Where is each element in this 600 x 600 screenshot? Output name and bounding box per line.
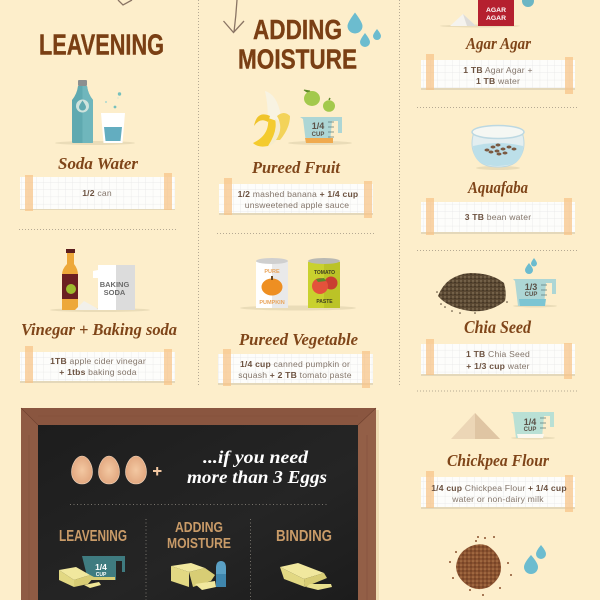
icon: banana, apples and measuring cup: 1/4 [312,121,324,131]
icon: measuring cup and butter: CUP [96,572,107,578]
chalk column: leavening [59,528,127,588]
icon: butter and salt shaker [171,561,226,590]
icon: agar agar box and powder [440,0,534,28]
subheading: aquafaba: Aquafaba [467,178,528,197]
note card: chickpea flour: water or non-dairy milk [451,494,544,504]
chalk heading [187,447,327,487]
icon: bowl of bean water [472,126,524,170]
panel: pureed fruit [219,90,373,218]
heading: leavening: LEAVENING [39,30,164,62]
panel: chalkboard [21,408,379,600]
subheading: chia seed: Chia Seed [464,317,532,337]
note card: chia seed: + 1/3 cup water [466,361,530,371]
icon: soda water bottle and glass [55,80,135,145]
arrow: to leavening [118,0,132,5]
panel: chia seed [421,258,575,379]
icon: pumpkin and tomato cans: PUMPKIN [259,300,285,306]
note card: chia seed [421,339,575,379]
note card: soda water [20,173,175,211]
panel: pureed vegetable [218,258,373,388]
icon: agar agar box and powder: AGAR [486,15,506,22]
icon: measuring cup and butter [59,556,125,588]
panel: aquafaba [421,126,575,235]
panel: flax seed [439,536,561,600]
icon: flour pile and measuring cup [451,412,555,440]
icon: chia seeds, drops and measuring cup [436,258,557,314]
heading: adding moisture: ADDING [253,14,342,45]
icon: pumpkin and tomato cans: PURE [264,269,280,275]
panel: vinegar and baking soda [20,249,177,385]
arrow: to adding moisture [224,0,244,32]
subheading: chickpea flour: Chickpea Flour [447,451,549,470]
frame [21,408,379,600]
note card: aquafaba [421,198,575,235]
note card: chia seed: 1 TB Chia Seed [466,349,530,359]
note card: agar agar [421,54,575,94]
chalk heading: more than 3 Eggs [187,467,327,487]
note card: agar agar: 1 TB Agar Agar + [463,65,533,75]
icon: three eggs [72,456,146,484]
subheading: soda water: Soda Water [58,154,138,173]
note card: pureed fruit: unsweetened apple sauce [245,200,349,210]
icon: measuring cup and butter: 1/4 [95,562,107,572]
note card: pureed vegetable [218,349,373,388]
chalk column: adding moisture: MOISTURE [167,535,231,552]
note card: pureed fruit [219,178,373,218]
note card: aquafaba: 3 TB bean water [465,212,531,222]
icon: flour pile and measuring cup: CUP [524,427,536,433]
icon: flour pile and measuring cup: 1/4 [524,417,536,427]
heading: adding moisture [238,14,357,74]
icon: banana, apples and measuring cup [253,90,352,147]
note card: pureed vegetable: 1/4 cup canned pumpkin or [240,359,350,369]
note card: vinegar and baking soda [20,346,175,385]
subheading: vinegar + baking soda: Vinegar + Baking soda [21,320,177,339]
note card: vinegar and baking soda: 1TB apple cider vinegar [50,356,146,366]
plus sign [153,467,162,476]
note card: agar agar: 1 TB water [476,76,520,86]
icon: vinegar bottle and baking soda box [50,249,150,312]
note card: chickpea flour: 1/4 cup Chickpea Flour + 1/4 cup [431,483,567,493]
chalk column: leavening: LEAVENING [59,528,127,545]
note card: pureed vegetable: squash + 2 TB tomato paste [238,370,352,380]
icon: pumpkin and tomato cans [240,258,356,310]
icon: flax seeds and drops [449,536,546,596]
subheading: pureed vegetable: Pureed Vegetable [238,330,358,349]
icon: vinegar bottle and baking soda box: SODA [104,288,126,297]
icon: vinegar bottle and baking soda box: BAKING [100,280,129,289]
subheading: pureed fruit: Pureed Fruit [251,158,341,177]
chalk column: binding [276,528,332,590]
chalk column: adding moisture [167,519,231,590]
icon: water drops [348,12,381,47]
icon: banana, apples and measuring cup: CUP [312,132,324,138]
note card: chickpea flour [421,471,575,512]
note card: soda water: 1/2 can [82,188,112,198]
panel: agar agar [421,0,575,94]
icon: chia seeds, drops and measuring cup: 1/3 [525,282,537,292]
icon: pumpkin and tomato cans: TOMATO [314,270,335,276]
panel: soda water [20,80,175,211]
chalk column: adding moisture: ADDING [175,519,223,536]
icon: butter stick [280,563,332,590]
note card: pureed fruit: 1/2 mashed banana + 1/4 cup [238,189,358,199]
subheading: agar agar: Agar Agar [465,34,531,53]
chalk heading: ...if you need [203,447,309,467]
panel: chickpea flour [421,412,575,512]
heading: adding moisture: MOISTURE [238,44,357,74]
chalk column: binding: BINDING [276,528,332,545]
icon: agar agar box and powder: AGAR [486,7,506,14]
icon: pumpkin and tomato cans: PASTE [316,299,333,305]
note card: vinegar and baking soda: + 1tbs baking soda [59,367,137,377]
icon: chia seeds, drops and measuring cup: CUP [525,292,537,298]
